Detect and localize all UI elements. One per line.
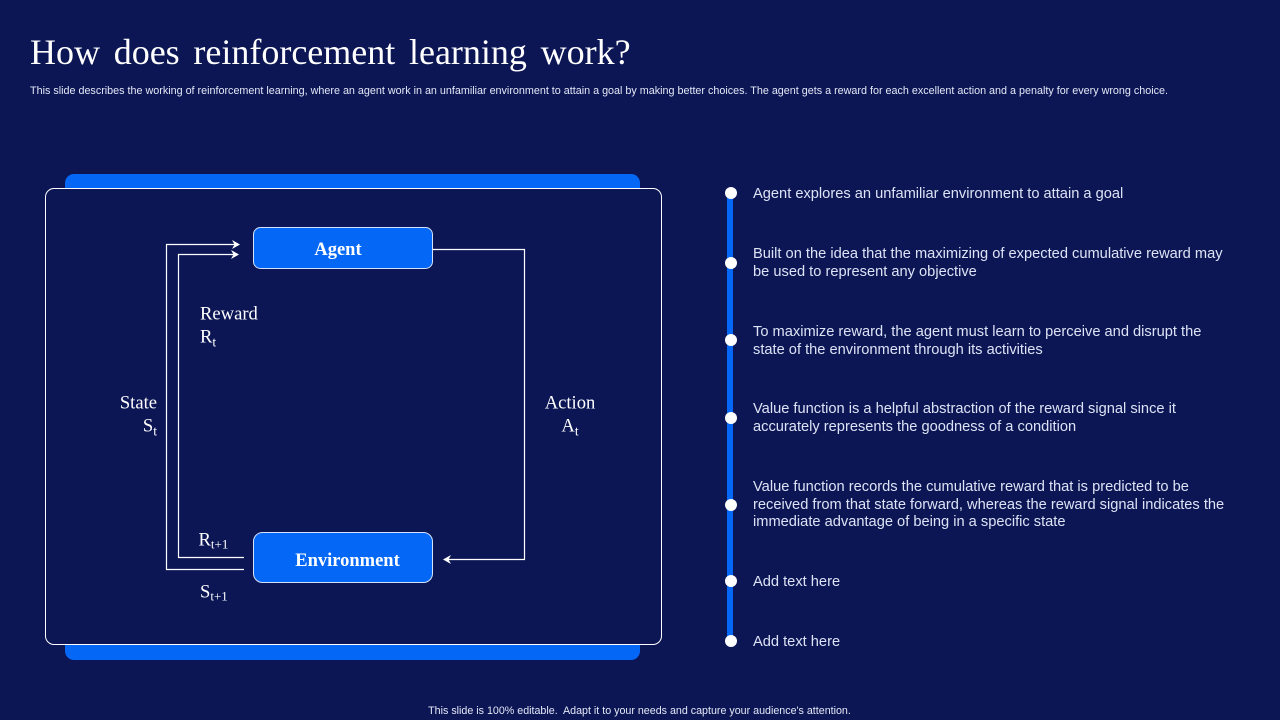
text: point 4: accurately represents the goodness of a condition <box>753 419 1076 435</box>
label: reward <box>200 304 259 350</box>
label: reward: R <box>200 326 212 348</box>
label: reward: t <box>212 334 216 350</box>
text: point 4: Value function is a helpful abstraction of the reward signal since it <box>753 401 1176 417</box>
label: action: A <box>561 416 575 436</box>
title: How does reinforcement learning work? <box>30 32 631 72</box>
text: point 7: Add text here <box>753 634 840 650</box>
text: point 2: be used to represent any objective <box>753 264 977 280</box>
label: next state: S <box>200 582 210 602</box>
timeline dot 1 <box>724 187 736 199</box>
text: point 5: immediate advantage of being in a specific state <box>753 514 1066 530</box>
label: reward: Reward <box>200 304 259 324</box>
label: action: t <box>575 424 579 438</box>
text: point 4 <box>753 401 1176 435</box>
text: point 3: state of the environment through its activities <box>753 342 1043 358</box>
panel: diagram frame <box>45 188 662 645</box>
timeline dot 7 <box>724 635 736 647</box>
text: point 3 <box>753 324 1201 358</box>
panel: diagram backing <box>65 174 640 660</box>
timeline dot 4 <box>724 412 736 424</box>
label: next state: t+1 <box>210 588 228 604</box>
footer note: This slide is 100% editable. Adapt it to your needs and capture your audience's attention. <box>428 705 851 717</box>
text: point 5: received from that state forward, whereas the reward signal indicates the <box>753 497 1224 513</box>
label: action: Action <box>545 392 596 414</box>
timeline dot 2 <box>724 256 736 268</box>
text: point 1: Agent explores an unfamiliar environment to attain a goal <box>753 186 1123 202</box>
timeline dot 5 <box>724 498 736 510</box>
box: agent <box>254 228 432 268</box>
label: next reward: t+1 <box>211 536 228 552</box>
timeline dot 6 <box>724 575 736 587</box>
box: environment: Environment <box>295 551 401 571</box>
text: point 3: To maximize reward, the agent must learn to perceive and disrupt the <box>753 324 1201 340</box>
label: state: S <box>143 416 153 436</box>
label: state: State <box>120 392 157 414</box>
text: point 5: Value function records the cumulative reward that is predicted to be <box>753 479 1189 495</box>
label: state: t <box>153 424 157 438</box>
label: action <box>545 392 596 438</box>
label: state <box>120 392 157 438</box>
timeline dot 3 <box>724 334 736 346</box>
text: point 2: Built on the idea that the maximizing of expected cumulative reward may <box>753 246 1223 262</box>
box: agent: Agent <box>314 240 362 260</box>
arrow: state path to agent <box>166 240 244 570</box>
arrow: reward path to agent <box>178 250 244 558</box>
box: environment <box>254 532 432 582</box>
text: point 2 <box>753 246 1223 280</box>
subtitle description: This slide describes the working of reinforcement learning, where an agent work in an unfamiliar environment to attain a goal by making better choices. The agent gets a reward for each excellent action and a penalty for every wrong choice. <box>30 85 1168 97</box>
text: point 5 <box>753 479 1224 530</box>
label: next reward: R <box>198 530 211 550</box>
timeline line <box>727 193 732 641</box>
arrow: action path to environment <box>433 250 524 564</box>
text: point 6: Add text here <box>753 574 840 590</box>
